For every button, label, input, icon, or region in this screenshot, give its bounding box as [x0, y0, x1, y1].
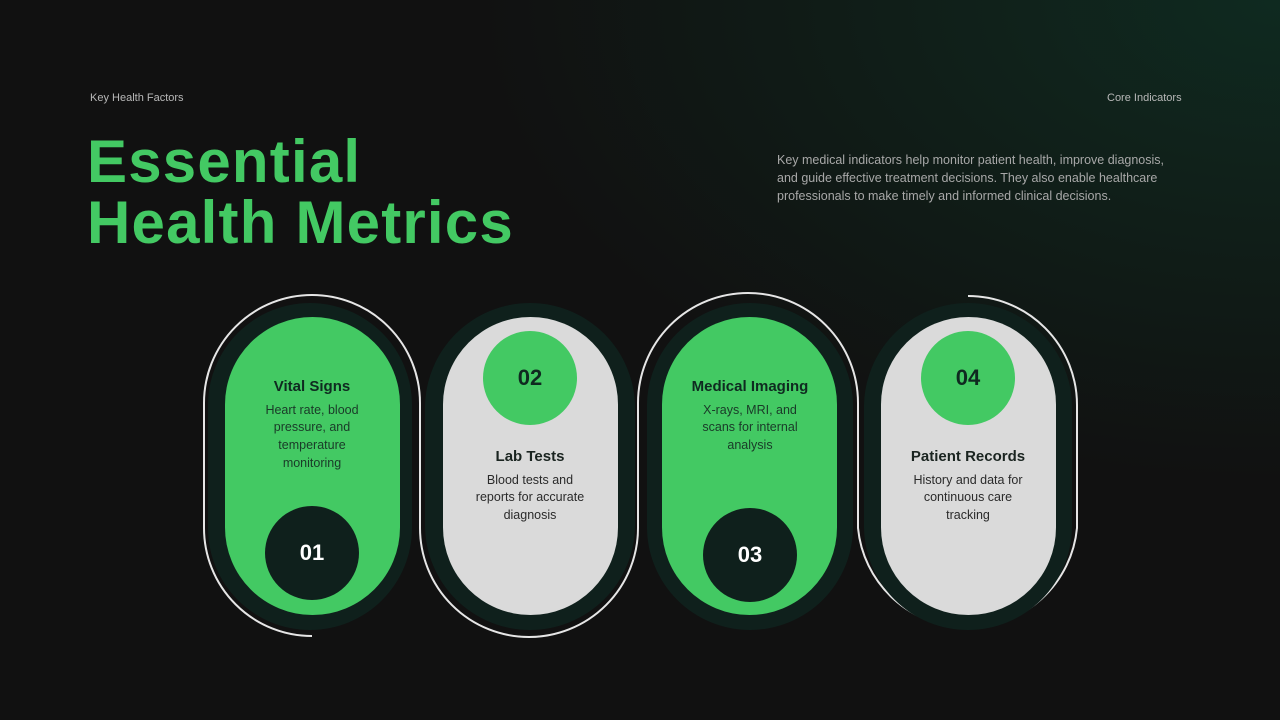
card 4: patient records: continuous care	[924, 490, 1012, 504]
card 3: medical imaging	[647, 303, 853, 630]
title: Health Metrics	[87, 189, 514, 256]
card 4: patient records: History and data for	[913, 473, 1023, 487]
title	[87, 128, 514, 256]
description paragraph	[777, 153, 1164, 203]
card 2: lab tests: reports for accurate	[476, 490, 584, 504]
card 1: vital signs	[208, 303, 412, 630]
card 2: lab tests: Blood tests and	[487, 473, 573, 487]
card 4: patient records: tracking	[946, 508, 990, 522]
card 3: medical imaging: analysis	[727, 438, 773, 452]
card 2: lab tests: diagnosis	[504, 508, 556, 522]
title: Essential	[87, 128, 361, 195]
description paragraph: professionals to make timely and informed clinical decisions.	[777, 189, 1111, 203]
card 1: vital signs: pressure, and	[274, 420, 350, 434]
card 2: lab tests	[425, 303, 635, 630]
card 3: medical imaging: X-rays, MRI, and	[703, 403, 797, 417]
card 1: vital signs: Heart rate, blood	[265, 403, 359, 417]
label: core indicators: Core Indicators	[1107, 92, 1182, 104]
card 2: lab tests: 02	[518, 365, 542, 390]
card 1: vital signs: temperature	[278, 438, 346, 452]
card 1: vital signs: 01	[300, 540, 324, 565]
card 4: patient records: 04	[956, 365, 981, 390]
card 3: medical imaging: Medical Imaging	[692, 378, 808, 395]
description paragraph: Key medical indicators help monitor patient health, improve diagnosis,	[777, 153, 1164, 167]
card 3: medical imaging: scans for internal	[702, 420, 798, 434]
card 4: patient records: Patient Records	[911, 448, 1025, 465]
card 4: patient records	[864, 303, 1072, 630]
card 1: vital signs: Vital Signs	[274, 378, 350, 395]
label: key health factors: Key Health Factors	[90, 92, 184, 104]
card 1: vital signs: monitoring	[283, 456, 341, 470]
description paragraph: and guide effective treatment decisions. They also enable healthcare	[777, 171, 1157, 185]
serpentine outline	[204, 293, 1077, 637]
card 2: lab tests: Lab Tests	[496, 448, 564, 465]
card 3: medical imaging: 03	[738, 542, 762, 567]
